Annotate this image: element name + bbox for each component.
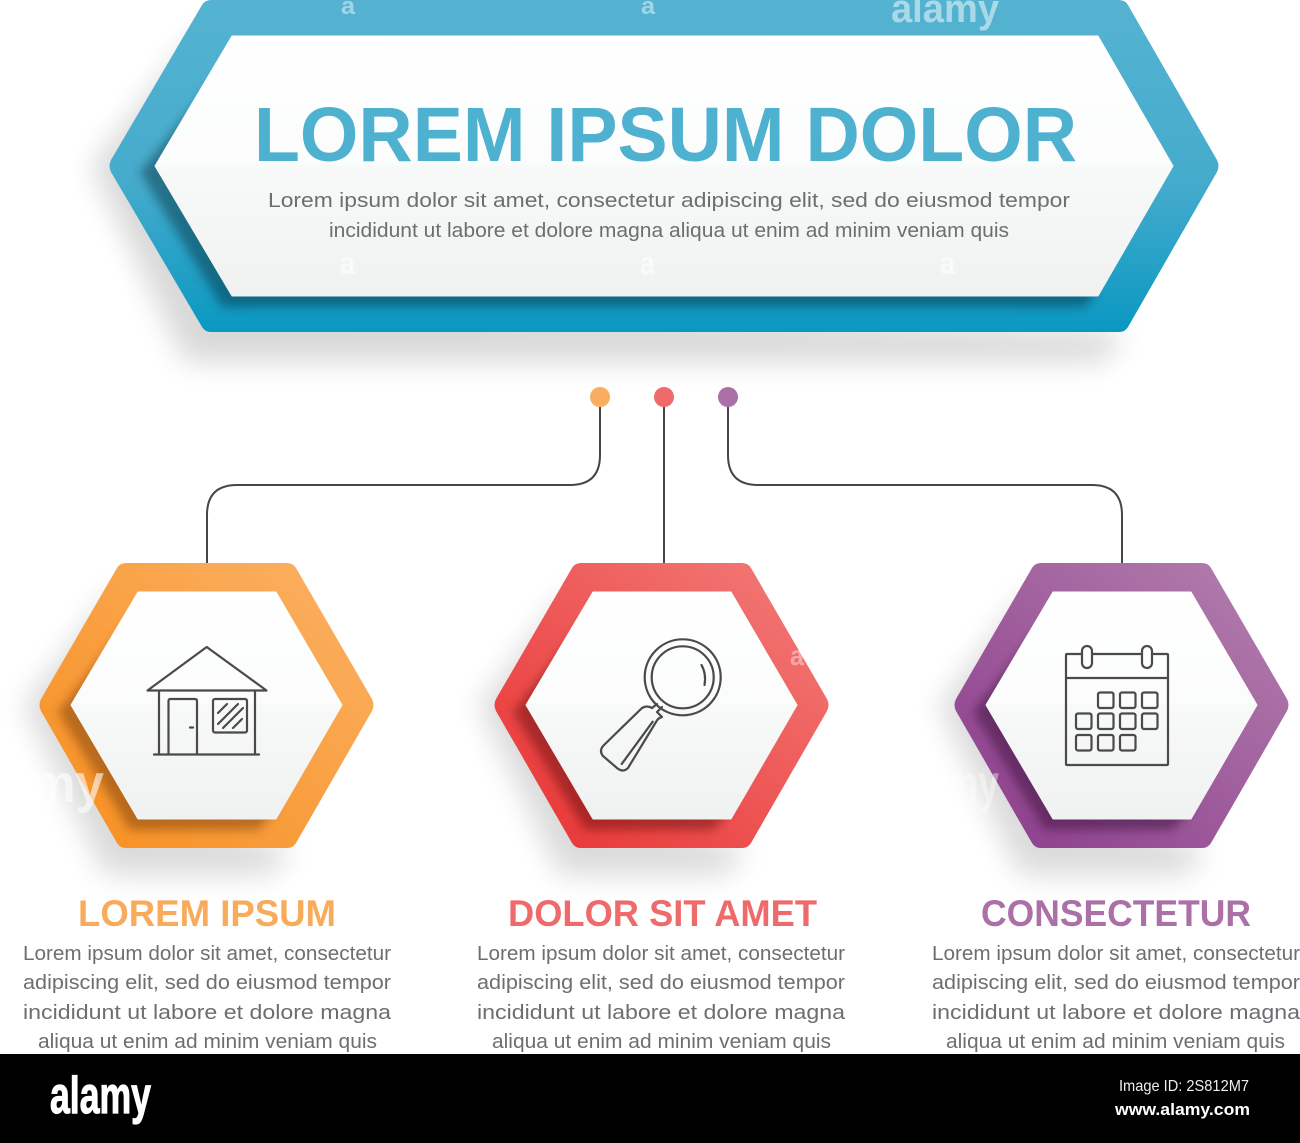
website: www.alamy.com: [1114, 1100, 1250, 1119]
text block: lorem ipsum: incididunt ut labore et dolore magna: [23, 1002, 392, 1024]
panel: purple hexagon: [939, 563, 1288, 875]
text block: dolor sit amet: aliqua ut enim ad minim veniam quis: [492, 1031, 831, 1053]
watermark marks: a: [340, 245, 355, 281]
text block: consectetur: adipiscing elit, sed do eiusmod tempor: [932, 972, 1300, 994]
text block: lorem ipsum: adipiscing elit, sed do eiusmod tempor: [23, 972, 391, 994]
text block: lorem ipsum: LOREM IPSUM: [78, 893, 336, 934]
icon: house: [148, 647, 266, 754]
footer bar: [0, 1054, 1300, 1143]
watermark marks: [30, 0, 1000, 814]
image id: Image ID: 2S812M7: [1119, 1078, 1249, 1095]
watermark marks: a: [640, 245, 655, 281]
watermark marks: a: [790, 640, 804, 671]
connector: orange: [207, 387, 610, 564]
text block: dolor sit amet: adipiscing elit, sed do eiusmod tempor: [477, 972, 845, 994]
header description: incididunt ut labore et dolore magna aliqua ut enim ad minim veniam quis: [329, 220, 1009, 242]
text block: dolor sit amet: Lorem ipsum dolor sit amet, consectetur: [477, 943, 845, 965]
panel: header banner: [92, 0, 1218, 362]
text block: dolor sit amet: DOLOR SIT AMET: [508, 893, 817, 934]
header description: Lorem ipsum dolor sit amet, consectetur adipiscing elit, sed do eiusmod tempor: [268, 190, 1070, 212]
text block: dolor sit amet: [477, 893, 846, 1053]
text block: consectetur: [932, 893, 1300, 1053]
title: LOREM IPSUM DOLOR: [254, 92, 1077, 178]
text block: consectetur: CONSECTETUR: [981, 893, 1251, 934]
watermark marks: my: [945, 754, 999, 814]
text block: consectetur: aliqua ut enim ad minim veniam quis: [946, 1031, 1285, 1053]
panel: red hexagon: [479, 563, 828, 875]
connector: red: [654, 387, 674, 564]
panel: orange hexagon: [24, 563, 374, 875]
text block: consectetur: incididunt ut labore et dolore magna: [932, 1002, 1300, 1024]
watermark marks: a: [940, 245, 955, 281]
header description: [268, 190, 1070, 242]
text block: lorem ipsum: [23, 893, 392, 1053]
connector: purple: [718, 387, 1122, 564]
text block: dolor sit amet: incididunt ut labore et dolore magna: [477, 1002, 846, 1024]
text block: lorem ipsum: Lorem ipsum dolor sit amet, consectetur: [23, 943, 391, 965]
icon: calendar: [1066, 646, 1168, 765]
watermark marks: my: [30, 754, 104, 814]
text block: lorem ipsum: aliqua ut enim ad minim veniam quis: [38, 1031, 377, 1053]
text block: consectetur: Lorem ipsum dolor sit amet, consectetur: [932, 943, 1300, 965]
icon: magnifying glass: [601, 639, 721, 770]
logo: alamy: alamy: [50, 1067, 151, 1125]
